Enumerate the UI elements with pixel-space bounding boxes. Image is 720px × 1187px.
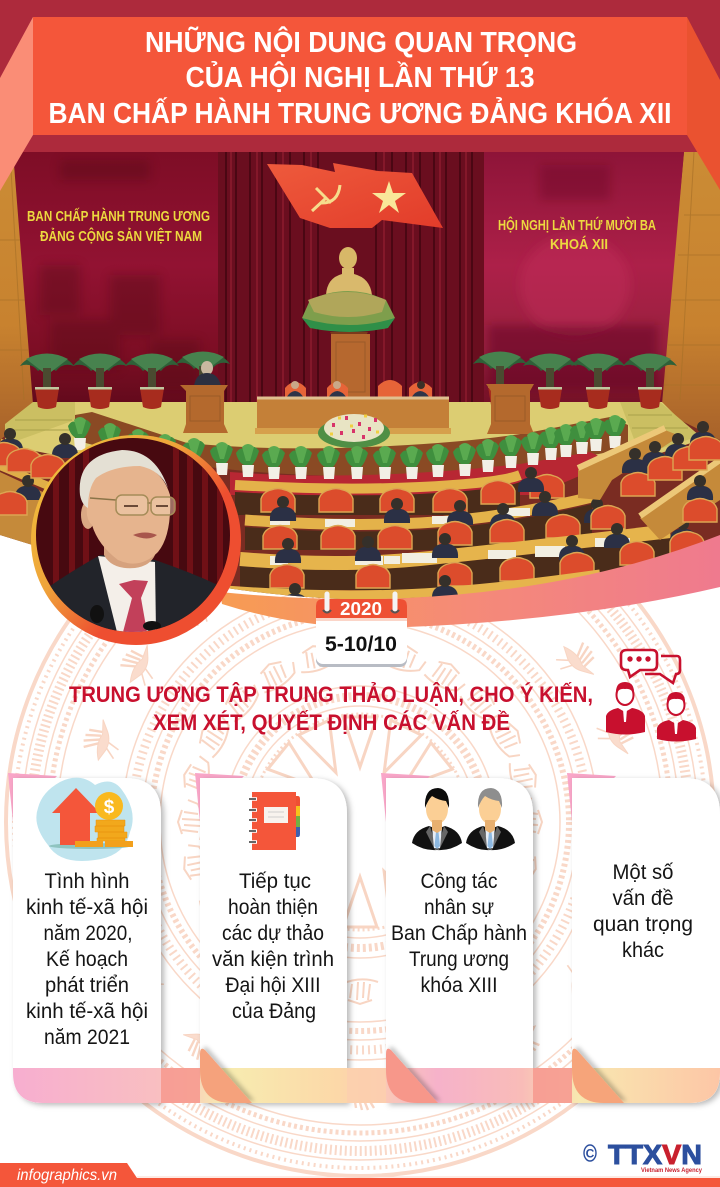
wall lettering right <box>498 216 656 249</box>
card 2: documents <box>195 773 347 1103</box>
card 3: personnel: Ban Chấp hành <box>391 922 527 945</box>
left lectern <box>180 361 228 433</box>
card 2: documents: Tiếp tục <box>239 870 311 893</box>
card 2: documents: văn kiện trình <box>212 948 334 971</box>
wall lettering left: BAN CHẤP HÀNH TRUNG ƯƠNG <box>27 208 210 225</box>
card 4: other issues: khác <box>622 939 664 962</box>
top banner background <box>0 0 720 152</box>
stage <box>5 402 700 476</box>
icon: two officials <box>412 788 515 850</box>
Ho Chi Minh bust and flowers <box>302 247 395 400</box>
icon: arrow and coins <box>36 778 133 861</box>
card 4: other issues <box>567 773 720 1103</box>
presidium table <box>255 380 451 434</box>
card 1: economy: kinh tế-xã hội <box>26 1000 148 1023</box>
page-curl folds <box>200 1049 252 1103</box>
wall lettering right: KHOÁ XII <box>550 236 608 253</box>
card 1: economy: năm 2021 <box>44 1026 130 1049</box>
wall lettering left <box>27 208 210 245</box>
card 4: other issues: vấn đề <box>612 887 674 910</box>
card 1: economy: phát triển <box>45 974 129 997</box>
curved ribbon under photo <box>220 535 720 628</box>
shirt <box>98 556 156 632</box>
icon: notebook <box>249 792 300 850</box>
calendar date badge: 5-10/10 <box>325 633 397 656</box>
card 2: documents: hoàn thiện <box>228 896 318 919</box>
large plants <box>20 352 677 409</box>
wall lettering left: ĐẢNG CỘNG SẢN VIỆT NAM <box>40 227 202 245</box>
logo: TTXVN: Vietnam News Agency <box>641 1167 702 1174</box>
neck and face <box>104 547 155 568</box>
banner left fold <box>0 17 33 191</box>
card 1: economy: Kế hoạch <box>46 948 128 971</box>
microphones <box>90 605 104 623</box>
card 3: personnel: Công tác <box>420 870 498 893</box>
card 1: economy: Tình hình <box>44 870 130 893</box>
footer tab: infographics.vn <box>0 1163 720 1184</box>
audience left wing <box>0 428 78 545</box>
banner right fold <box>687 17 720 190</box>
title banner: BAN CHẤP HÀNH TRUNG ƯƠNG ĐẢNG KHÓA XII <box>48 96 672 130</box>
card 1: economy <box>8 773 161 1103</box>
card 1: economy: kinh tế-xã hội <box>26 896 148 919</box>
logo: TTXVN <box>584 1139 702 1174</box>
title banner: CỦA HỘI NGHỊ LẦN THỨ 13 <box>186 60 534 94</box>
right lectern <box>486 384 534 434</box>
title banner <box>33 17 687 135</box>
wall lettering right: HỘI NGHỊ LẦN THỨ MƯỜI BA <box>498 216 656 234</box>
card 4: other issues: Một số <box>612 861 674 884</box>
title banner: NHỮNG NỘI DUNG QUAN TRỌNG <box>145 25 577 59</box>
card 3: personnel: nhân sự <box>424 896 494 919</box>
card 2: documents: của Đảng <box>232 1000 316 1023</box>
party flag <box>267 163 443 228</box>
audience right wing <box>578 421 720 540</box>
icon: arrow and coins: $ <box>104 797 115 818</box>
card 2: documents: các dự thảo <box>222 922 324 945</box>
calendar date badge <box>316 594 407 667</box>
logo: TTXVN: C <box>586 1146 595 1160</box>
row of small plants <box>68 415 626 479</box>
audience rows center <box>225 467 704 608</box>
right velvet wall <box>480 152 684 404</box>
calendar date badge: 2020 <box>340 599 382 619</box>
wooden side walls <box>0 152 720 440</box>
card 4: other issues: quan trọng <box>593 913 693 936</box>
card 1: economy: năm 2020, <box>44 922 132 945</box>
footer bar <box>0 1178 720 1187</box>
footer tab: infographics.vn: infographics.vn <box>17 1167 117 1184</box>
red heading: TRUNG ƯƠNG TẬP TRUNG THẢO LUẬN, CHO Ý KIẾN, <box>69 682 593 707</box>
red heading: XEM XÉT, QUYẾT ĐỊNH CÁC VẤN ĐỀ <box>153 710 510 735</box>
carpet <box>230 452 612 495</box>
card 2: documents: Đại hội XIII <box>226 974 320 997</box>
icon: discussion <box>606 650 696 742</box>
card 3: personnel <box>381 773 533 1103</box>
portrait medallion <box>31 435 241 645</box>
card 3: personnel: khóa XIII <box>420 974 498 997</box>
background pattern: bronze drum <box>6 468 714 1176</box>
center curtain <box>218 152 484 404</box>
suit <box>50 555 216 632</box>
left velvet wall <box>13 152 222 404</box>
flower arrangement <box>318 414 390 448</box>
hair <box>80 450 168 508</box>
glasses <box>90 498 152 503</box>
red heading <box>69 682 593 735</box>
card 3: personnel: Trung ương <box>409 948 509 971</box>
photo: conference hall <box>0 152 720 612</box>
tie <box>119 580 148 632</box>
bottom gradient band <box>13 1049 720 1103</box>
logo: TTXVN: TTXVN <box>608 1139 702 1170</box>
